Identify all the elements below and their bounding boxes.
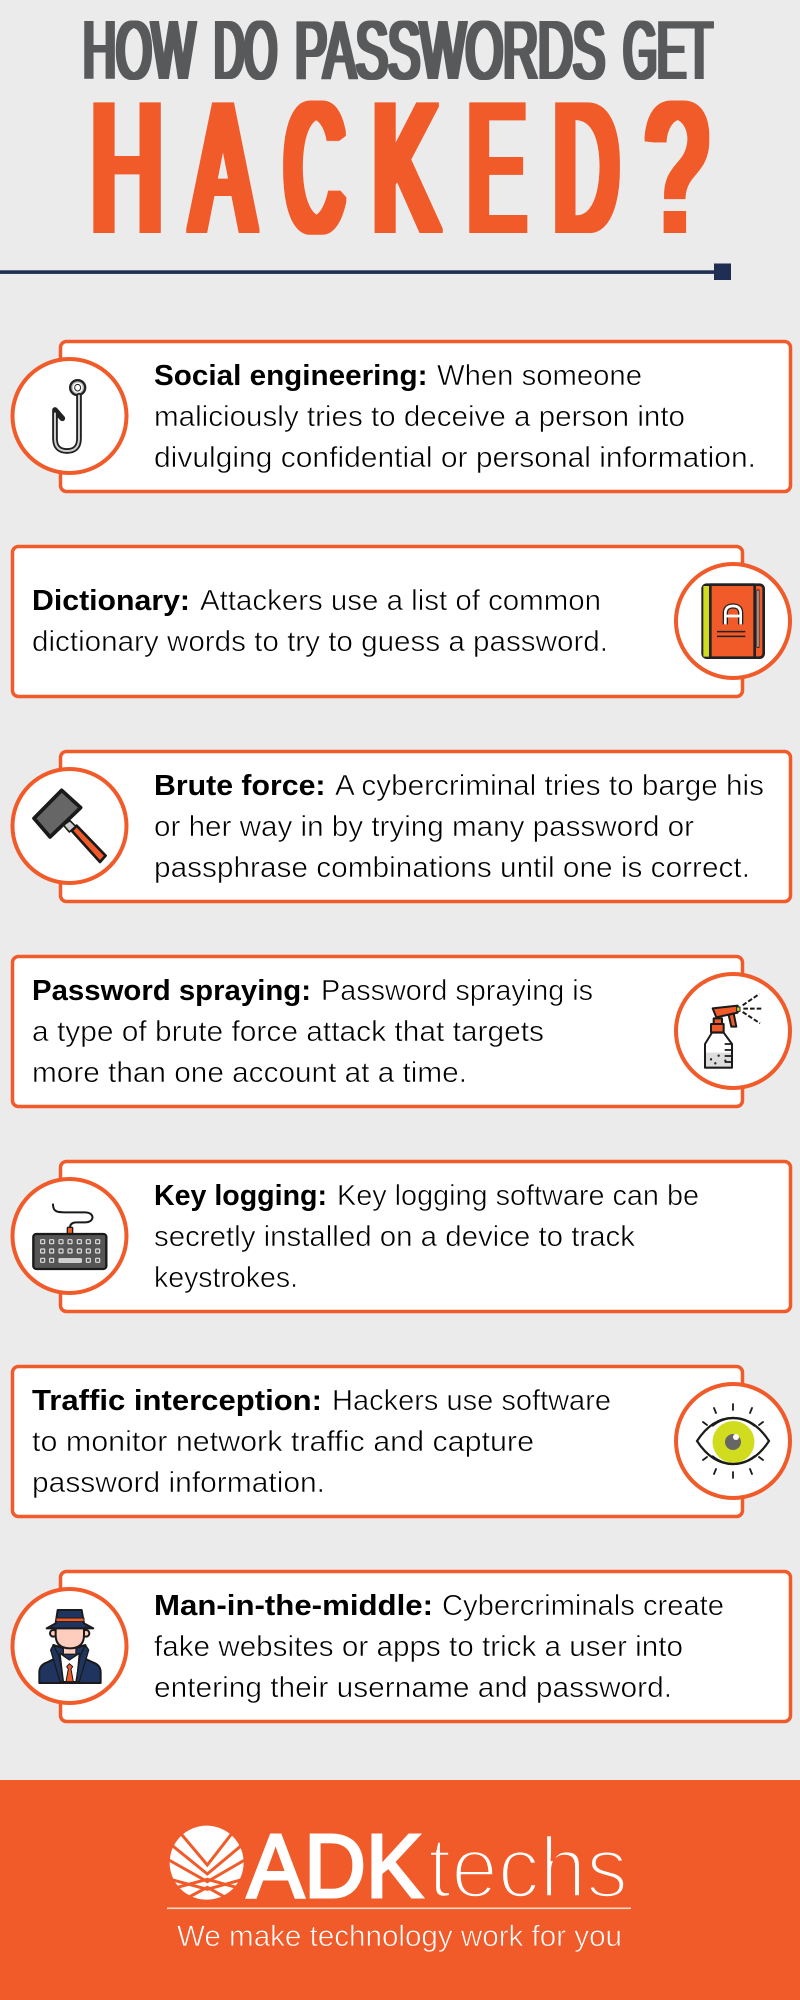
tagline: We make technology work for you — [177, 1920, 622, 1953]
text: key logging: secretly installed on a device to track — [154, 1221, 635, 1253]
logo rule — [167, 1908, 631, 1909]
panel: social engineering — [12, 342, 790, 492]
text: key logging — [154, 1180, 699, 1294]
logo wordmark: techs — [428, 1820, 628, 1916]
text: traffic interception — [32, 1385, 611, 1499]
text: key logging: keystrokes. — [154, 1262, 298, 1294]
heading line: hacked: ? — [646, 64, 707, 270]
text: social engineering — [154, 360, 756, 474]
text: brute force: Brute force: — [154, 770, 326, 802]
text: social engineering: When someone — [437, 360, 642, 392]
panel: traffic interception — [12, 1366, 790, 1516]
icon: spray bottle — [676, 974, 790, 1088]
icon: hammer — [12, 769, 126, 883]
text: password spraying: Password spraying: — [32, 975, 311, 1007]
text: man-in-the-middle: entering their username and password. — [154, 1672, 672, 1704]
icon: spy — [12, 1589, 126, 1703]
text: traffic interception: Traffic interception: — [32, 1385, 322, 1417]
text: password spraying: Password spraying is — [321, 975, 593, 1007]
heading line: hacked: A — [192, 64, 254, 270]
heading line: how do passwords get: DO — [214, 3, 277, 96]
icon: keyboard — [12, 1179, 126, 1293]
title — [83, 3, 712, 270]
heading line: how do passwords get: HOW — [83, 3, 195, 96]
heading line: hacked: H — [91, 64, 163, 270]
heading line: hacked — [91, 64, 707, 270]
panel: dictionary — [12, 546, 790, 696]
logo wordmark: ADK — [247, 1817, 423, 1917]
divider line with square end — [0, 264, 731, 280]
icon: eye — [676, 1384, 790, 1498]
text: dictionary: Dictionary: — [32, 585, 190, 617]
heading line: how do passwords get: GET — [623, 3, 712, 96]
text: social engineering: maliciously tries to deceive a person into — [154, 401, 685, 433]
text: dictionary — [32, 585, 608, 658]
text: traffic interception: to monitor network traffic and capture — [32, 1426, 534, 1458]
text: traffic interception: Hackers use software — [332, 1385, 611, 1417]
text: traffic interception: password information. — [32, 1467, 325, 1499]
panel: key logging — [12, 1162, 790, 1312]
panel: brute force — [12, 752, 790, 902]
text: password spraying: more than one account at a time. — [32, 1057, 467, 1089]
text: man-in-the-middle — [154, 1590, 724, 1704]
panel: password spraying — [12, 956, 790, 1106]
text: dictionary: Attackers use a list of common — [200, 585, 601, 617]
heading line: hacked: K — [372, 64, 438, 270]
heading line: hacked: C — [285, 64, 344, 270]
text: brute force — [154, 770, 764, 884]
text: man-in-the-middle: fake websites or apps to trick a user into — [154, 1631, 683, 1663]
heading line: hacked: E — [468, 64, 525, 270]
panel: man-in-the-middle — [12, 1572, 790, 1722]
text: social engineering: Social engineering: — [154, 360, 428, 392]
text: brute force: A cybercriminal tries to barge his — [335, 770, 764, 802]
text: social engineering: divulging confidential or personal information. — [154, 442, 756, 474]
icon: fish hook — [12, 359, 126, 473]
footer panel — [0, 1780, 800, 2000]
text: man-in-the-middle: Man-in-the-middle: — [154, 1590, 433, 1622]
text: key logging: Key logging software can be — [337, 1180, 699, 1212]
text: dictionary: dictionary words to try to guess a password. — [32, 626, 608, 658]
text: brute force: passphrase combinations until one is correct. — [154, 852, 750, 884]
icon: dictionary book — [676, 564, 790, 678]
text: man-in-the-middle: Cybercriminals create — [442, 1590, 724, 1622]
text: password spraying — [32, 975, 593, 1089]
logo wordmark — [247, 1817, 628, 1917]
heading line: how do passwords get — [83, 3, 712, 96]
heading line: hacked: D — [554, 64, 618, 270]
text: brute force: or her way in by trying many password or — [154, 811, 694, 843]
logo mark — [160, 1817, 253, 1900]
text: key logging: Key logging: — [154, 1180, 327, 1212]
text: password spraying: a type of brute force attack that targets — [32, 1016, 544, 1048]
